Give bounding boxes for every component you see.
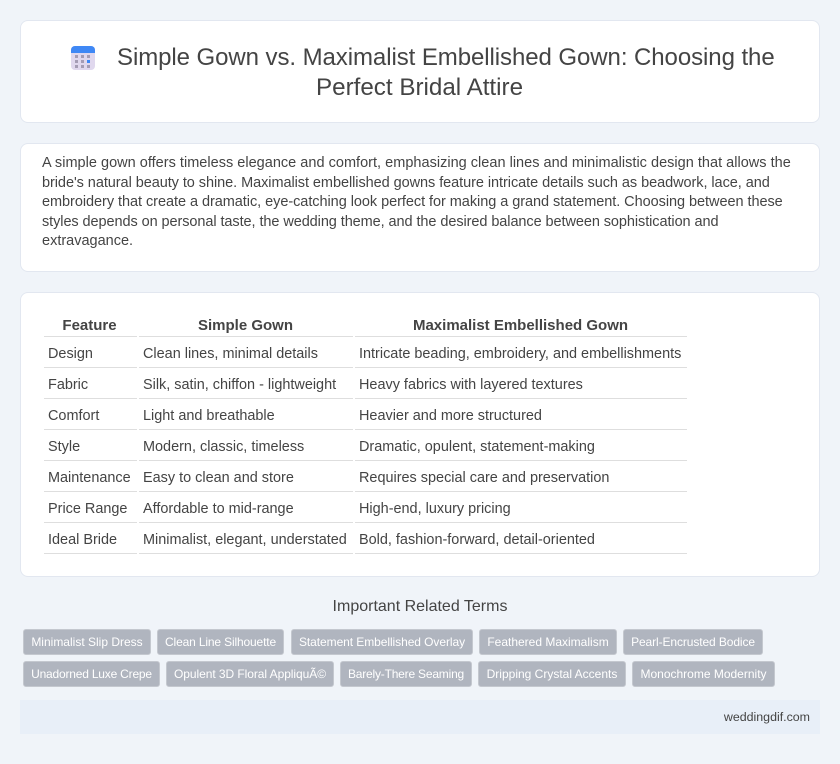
tag group: related terms [23, 629, 775, 687]
tag [291, 629, 473, 655]
row: Price Range: High-end, luxury pricing [359, 501, 511, 517]
row: Price Range [48, 501, 511, 517]
row: Comfort: Light and breathable [143, 408, 275, 424]
table header [62, 317, 628, 334]
tag: Pearl-Encrusted Bodice [631, 635, 755, 649]
tag: Opulent 3D Floral AppliquÃ© [174, 667, 326, 681]
footer [20, 700, 820, 734]
tag: Minimalist Slip Dress [31, 635, 143, 649]
row: Style: Style [48, 439, 80, 455]
paragraph [42, 155, 791, 249]
title card [20, 20, 820, 123]
row: Ideal Bride [48, 532, 595, 548]
row: Fabric: Silk, satin, chiffon - lightweight [143, 377, 336, 393]
paragraph: embroidery that create a dramatic, eye-catching look perfect for making a grand statement. Choosing between these [42, 194, 783, 210]
row: Price Range: Affordable to mid-range [143, 501, 294, 517]
tag [157, 629, 284, 655]
row: Style: Modern, classic, timeless [143, 439, 304, 455]
row: Ideal Bride: Bold, fashion-forward, detail-oriented [359, 532, 595, 548]
paragraph: A simple gown offers timeless elegance and comfort, emphasizing clean lines and minimalistic design that allows the [42, 155, 791, 171]
row: Style: Dramatic, opulent, statement-making [359, 439, 595, 455]
row: Maintenance: Maintenance [48, 470, 131, 486]
row: Maintenance: Requires special care and preservation [359, 470, 609, 486]
heading [117, 44, 775, 101]
tag [340, 661, 472, 687]
tag [632, 661, 775, 687]
tag: Clean Line Silhouette [165, 635, 276, 649]
tag: Unadorned Luxe Crepe [31, 667, 152, 681]
tag: Statement Embellished Overlay [299, 635, 465, 649]
table header: Maximalist Embellished Gown [413, 317, 628, 334]
row: Ideal Bride: Minimalist, elegant, understated [143, 532, 347, 548]
tag [479, 629, 617, 655]
heading: Simple Gown vs. Maximalist Embellished Gown: Choosing the [117, 44, 775, 71]
paragraph: extravagance. [42, 233, 133, 249]
row: Fabric: Fabric [48, 377, 88, 393]
table header: Feature [62, 317, 117, 334]
row: Design: Clean lines, minimal details [143, 346, 318, 362]
heading: Perfect Bridal Attire [316, 74, 523, 101]
tag: Barely-There Seaming [348, 667, 464, 681]
tag [23, 661, 160, 687]
heading: related terms: Important Related Terms [333, 598, 507, 615]
row: Comfort [48, 408, 542, 424]
tag: Monochrome Modernity [640, 667, 767, 681]
row: Ideal Bride: Ideal Bride [48, 532, 117, 548]
row: Design: Design [48, 346, 93, 362]
panel: comparison table [20, 292, 820, 577]
tag [166, 661, 334, 687]
row: Style [48, 439, 595, 455]
tag: Feathered Maximalism [487, 635, 609, 649]
paragraph: styles depends on personal taste, the wedding theme, and the desired balance between sophistication and [42, 214, 718, 230]
tag [23, 629, 151, 655]
table header: Simple Gown [198, 317, 293, 334]
row: Fabric [48, 377, 583, 393]
tag: Dripping Crystal Accents [487, 667, 617, 681]
row: Comfort: Comfort [48, 408, 99, 424]
panel: intro text [20, 143, 820, 272]
row: Design: Intricate beading, embroidery, and embellishments [359, 346, 681, 362]
row: Price Range: Price Range [48, 501, 127, 517]
row: Design [48, 346, 681, 362]
tag [478, 661, 626, 687]
icon: calendar [71, 46, 95, 70]
tag [623, 629, 763, 655]
row: Fabric: Heavy fabrics with layered textures [359, 377, 583, 393]
footer source text: weddingdif.com [724, 710, 810, 724]
row: Maintenance: Easy to clean and store [143, 470, 294, 486]
row: Maintenance [48, 470, 609, 486]
paragraph: bride's natural beauty to shine. Maximalist embellished gowns feature intricate details such as beadwork, lace, and [42, 175, 770, 191]
row: Comfort: Heavier and more structured [359, 408, 542, 424]
